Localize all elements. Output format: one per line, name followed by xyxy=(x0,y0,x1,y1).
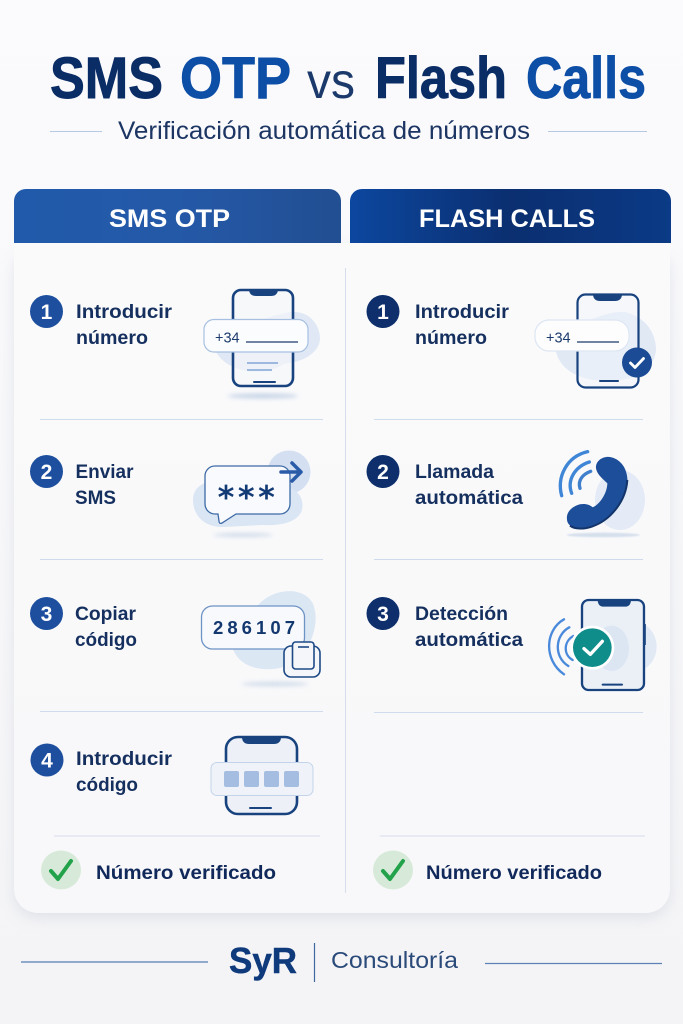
result: número verificado: Número verificado xyxy=(426,862,602,884)
step 3: detección automática xyxy=(366,597,657,690)
icon: phone detecting call xyxy=(549,599,657,690)
header: Flash Calls: FLASH CALLS xyxy=(419,205,595,233)
footer logo: Consultoría xyxy=(331,947,458,973)
result: número verificado: Número verificado xyxy=(96,862,276,884)
icon: ringing handset xyxy=(560,452,645,537)
icon: SMS bubble with arrow: *** xyxy=(218,478,278,516)
step 4: introducir código xyxy=(30,737,313,814)
title: vs xyxy=(307,53,355,109)
title: Calls xyxy=(526,46,646,111)
icon: SMS bubble with arrow xyxy=(193,450,310,537)
step 1: introducir número: Introducir xyxy=(415,302,510,323)
step 2: enviar SMS: SMS xyxy=(75,488,116,509)
step 2: llamada automática: Llamada xyxy=(415,462,494,483)
step 3: detección automática: automática xyxy=(415,630,523,651)
step 1: introducir número xyxy=(30,289,320,398)
header: SMS OTP xyxy=(14,189,341,243)
step 3: copiar código xyxy=(30,591,320,686)
footer logo xyxy=(21,940,662,982)
step 2: llamada automática xyxy=(366,452,645,537)
step 2: llamada automática: automática xyxy=(415,488,523,509)
step 4: introducir código: código xyxy=(76,775,138,796)
step 3: detección automática: Detección xyxy=(415,604,508,625)
icon: phone with number field and check: +34 xyxy=(546,330,571,346)
step 2: llamada automática: 2 xyxy=(377,461,389,484)
title: Flash xyxy=(375,46,507,111)
step 4: introducir código: 4 xyxy=(41,750,53,772)
panel: Flash Calls xyxy=(350,189,671,890)
step 4: introducir código: Introducir xyxy=(76,749,173,770)
step 1: introducir número: número xyxy=(76,328,148,349)
icon: phone with number field xyxy=(204,289,320,398)
step 3: detección automática: 3 xyxy=(377,603,389,626)
step 3: copiar código: 3 xyxy=(41,603,52,626)
header: Flash Calls xyxy=(350,189,671,243)
title: SMS xyxy=(50,46,163,111)
step 3: copiar código: Copiar xyxy=(75,604,137,625)
result: número verificado xyxy=(373,850,602,890)
step 1: introducir número xyxy=(366,294,656,388)
subtitle: Verificación automática de números xyxy=(118,117,530,145)
result: número verificado xyxy=(41,850,276,890)
step 2: enviar SMS: Enviar xyxy=(76,462,134,483)
icon: phone with number field: +34 xyxy=(215,330,240,346)
header: SMS OTP: SMS OTP xyxy=(109,205,230,233)
step 1: introducir número: Introducir xyxy=(76,302,173,323)
card background xyxy=(14,243,670,918)
icon: phone with code squares xyxy=(211,737,313,814)
step 1: introducir número: 1 xyxy=(377,301,389,324)
footer logo: SyR xyxy=(229,940,297,981)
step 1: introducir número: 1 xyxy=(41,301,53,324)
step 2: enviar SMS xyxy=(30,450,310,537)
icon: phone with number field and check xyxy=(535,294,656,388)
step 1: introducir número: número xyxy=(415,328,487,349)
title: OTP xyxy=(180,46,291,111)
step 3: copiar código: código xyxy=(75,630,137,651)
panel: SMS OTP xyxy=(14,189,341,890)
title xyxy=(50,46,646,111)
icon: code box with copy symbol: 286107 xyxy=(213,617,295,638)
step 2: enviar SMS: 2 xyxy=(41,461,52,484)
icon: code box with copy symbol xyxy=(202,591,320,686)
